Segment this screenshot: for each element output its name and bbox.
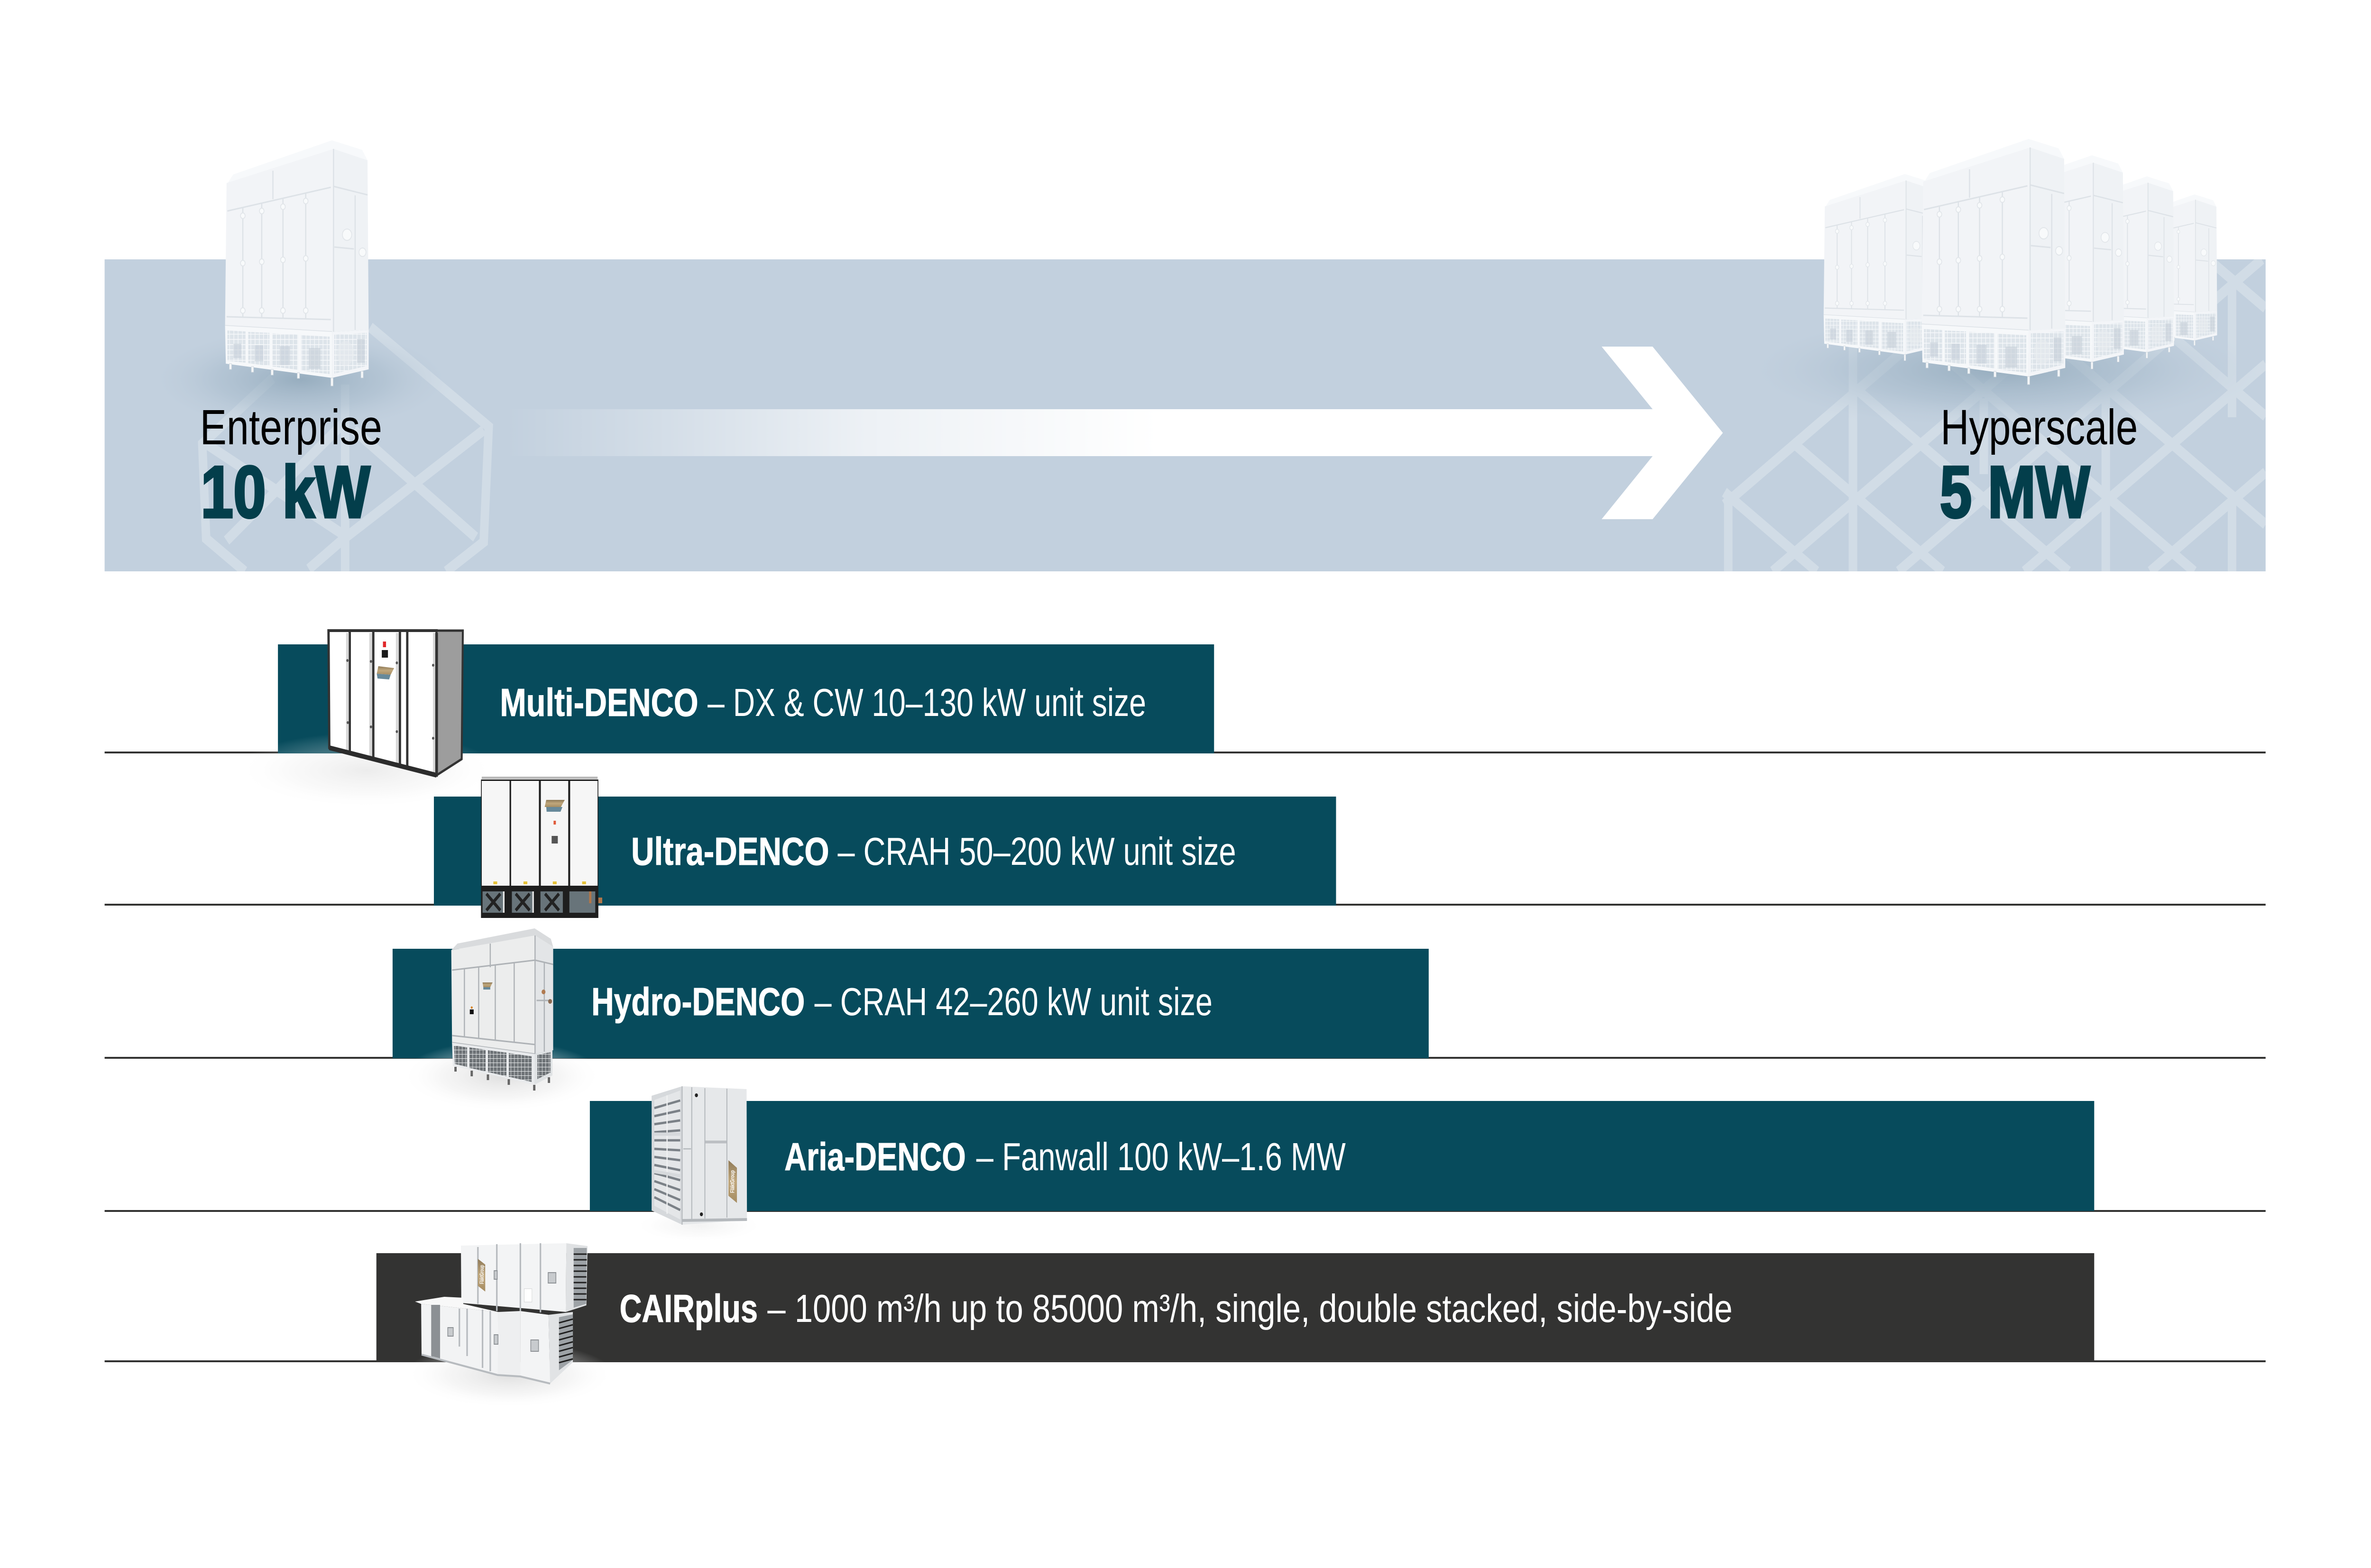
pattern: left cube outline xyxy=(202,327,489,571)
icon: Hydro-DENCO unit xyxy=(451,928,553,1091)
bar: CAIRplus xyxy=(377,1253,2094,1362)
icon: enterprise unit xyxy=(225,140,368,386)
bar: Multi-DENCO xyxy=(278,644,1214,753)
spec: CAIRplus: – 1000 m³/h up to 85000 m³/h, single, double stacked, side-by-side xyxy=(767,1286,1733,1331)
panel: scale band xyxy=(105,259,2266,571)
value: 5 MW: 5 MW xyxy=(1940,451,2090,533)
icon: hyperscale unit group xyxy=(1824,139,2217,385)
name: Ultra-DENCO: Ultra-DENCO xyxy=(631,829,829,874)
value: 10 kW: 10 kW xyxy=(201,451,370,533)
icon: Aria-DENCO unit: FläktGroup xyxy=(729,1170,735,1193)
icon: CAIRplus unit xyxy=(415,1243,588,1384)
name: CAIRplus: CAIRplus xyxy=(620,1286,758,1331)
label: Enterprise: Enterprise xyxy=(200,400,382,455)
shadow: hyperscale units xyxy=(1737,308,2262,431)
spec: Ultra-DENCO: – CRAH 50–200 kW unit size xyxy=(838,829,1236,874)
bar: Hydro-DENCO xyxy=(393,949,1429,1058)
shadow: Aria-DENCO unit xyxy=(633,1209,764,1242)
arrow: scale direction xyxy=(505,347,1723,519)
shadow: Multi-DENCO unit xyxy=(236,733,498,808)
baseline rules xyxy=(105,752,2266,1362)
name: Aria-DENCO: Aria-DENCO xyxy=(784,1135,966,1179)
spec: Multi-DENCO: – DX & CW 10–130 kW unit size xyxy=(708,680,1146,725)
spec: Hydro-DENCO: – CRAH 42–260 kW unit size xyxy=(815,980,1213,1024)
shadow: CAIRplus unit xyxy=(405,1342,614,1408)
icon: CAIRplus unit: FläktGroup xyxy=(478,1265,485,1284)
bar: Ultra-DENCO xyxy=(434,797,1336,906)
bar: Aria-DENCO xyxy=(590,1101,2094,1211)
label: Hyperscale: Hyperscale xyxy=(1940,400,2138,455)
icon: Ultra-DENCO unit xyxy=(481,777,602,918)
shadow: Hydro-DENCO unit xyxy=(402,1041,602,1112)
pattern: right lattice xyxy=(1724,259,2266,571)
icon: Multi-DENCO unit xyxy=(329,631,463,775)
spec: Aria-DENCO: – Fanwall 100 kW–1.6 MW xyxy=(976,1135,1346,1179)
name: Hydro-DENCO: Hydro-DENCO xyxy=(591,980,805,1024)
icon: Aria-DENCO unit xyxy=(652,1086,747,1225)
shadow: enterprise unit xyxy=(147,325,456,434)
name: Multi-DENCO: Multi-DENCO xyxy=(500,680,698,725)
